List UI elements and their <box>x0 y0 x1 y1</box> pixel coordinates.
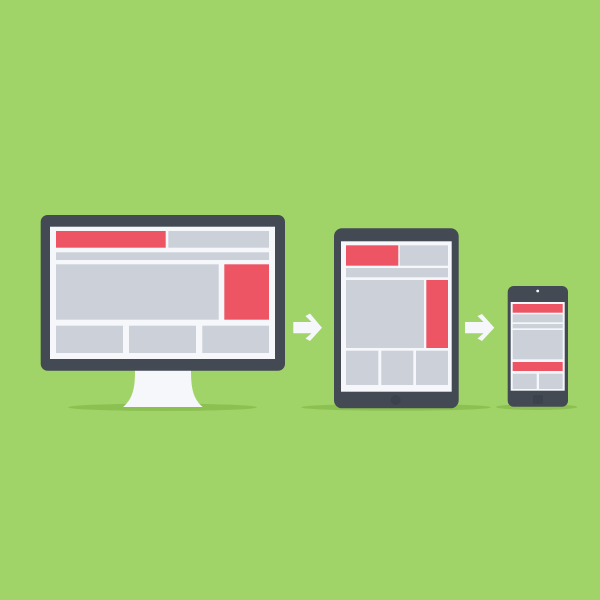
monitor footer block 2 <box>129 326 196 353</box>
arrow: tablet to phone <box>465 314 494 341</box>
arrow: monitor to tablet <box>293 314 322 341</box>
monitor shadow <box>68 404 257 411</box>
monitor main content <box>56 264 219 320</box>
tablet header banner <box>346 245 398 266</box>
tablet home button <box>391 395 401 405</box>
monitor navigation bar <box>56 252 269 260</box>
phone screen <box>511 302 565 391</box>
tablet screen <box>341 241 452 392</box>
tablet footer block 1 <box>346 351 378 385</box>
phone home button <box>533 395 543 404</box>
device: tablet <box>301 228 491 411</box>
phone shadow <box>496 404 577 410</box>
device: phone <box>496 286 577 410</box>
tablet main content <box>346 280 424 348</box>
tablet footer block 3 <box>416 351 448 385</box>
phone header block <box>513 314 563 322</box>
monitor bezel <box>41 215 285 371</box>
phone header banner <box>513 304 563 313</box>
tablet header block <box>400 245 448 266</box>
phone main content <box>513 330 563 359</box>
monitor header banner <box>56 231 166 248</box>
monitor header block <box>168 231 269 248</box>
tablet sidebar <box>426 280 448 348</box>
phone camera <box>536 290 539 292</box>
phone red banner <box>513 362 563 371</box>
tablet bezel <box>334 228 459 408</box>
phone footer block 2 <box>539 374 563 389</box>
monitor footer block 1 <box>56 326 123 353</box>
device: desktop monitor <box>41 215 285 411</box>
monitor screen <box>50 227 275 359</box>
monitor footer block 3 <box>202 326 269 353</box>
phone footer block 1 <box>513 374 537 389</box>
phone navigation bar <box>513 324 563 328</box>
monitor stand <box>123 370 203 407</box>
tablet navigation bar <box>346 268 448 277</box>
monitor sidebar <box>224 264 269 320</box>
tablet footer block 2 <box>381 351 413 385</box>
phone bezel <box>508 286 568 407</box>
tablet shadow <box>301 404 491 411</box>
